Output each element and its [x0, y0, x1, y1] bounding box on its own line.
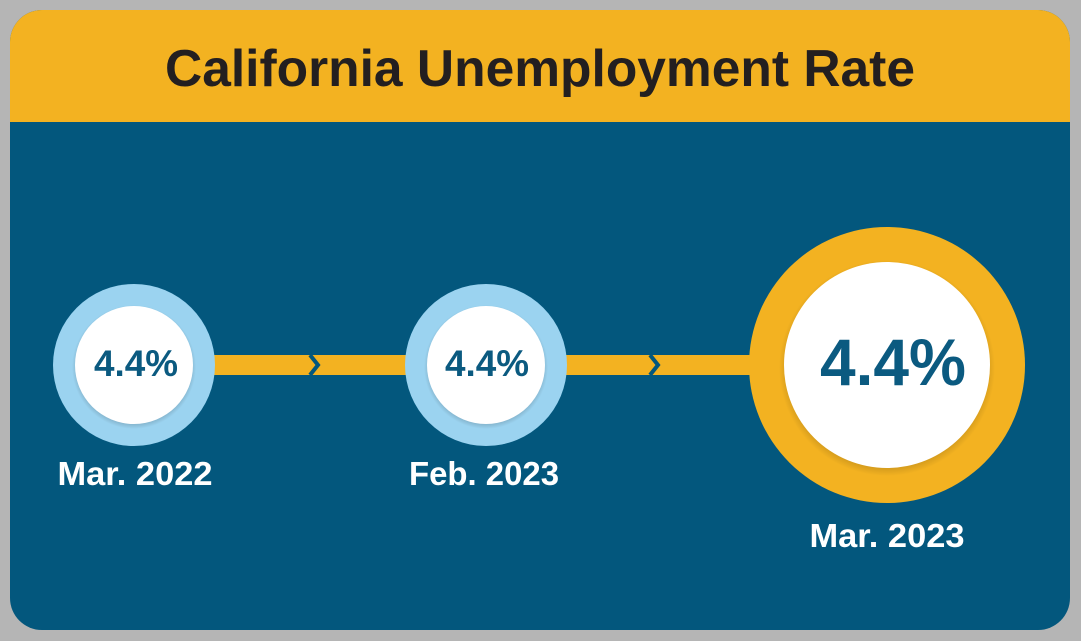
label: Mar. 2023: Mar. 2023 — [810, 517, 964, 554]
arrow: connector 1 — [205, 355, 415, 375]
title: California Unemployment Rate — [165, 40, 915, 98]
circle: Feb. 2023 — [405, 284, 567, 446]
circle: Mar. 2023: 4.4% — [820, 325, 966, 399]
label: Feb. 2023: Feb. 2023 — [409, 455, 559, 492]
circle: Mar. 2023 — [749, 227, 1025, 503]
arrow: connector 2 — [555, 355, 765, 375]
label: Mar. 2022: Mar. 2022 — [58, 455, 212, 492]
circle: Mar. 2022: 4.4% — [94, 343, 178, 384]
circle: Mar. 2022 — [53, 284, 215, 446]
header band — [10, 10, 1070, 122]
circle: Feb. 2023: 4.4% — [445, 343, 529, 384]
